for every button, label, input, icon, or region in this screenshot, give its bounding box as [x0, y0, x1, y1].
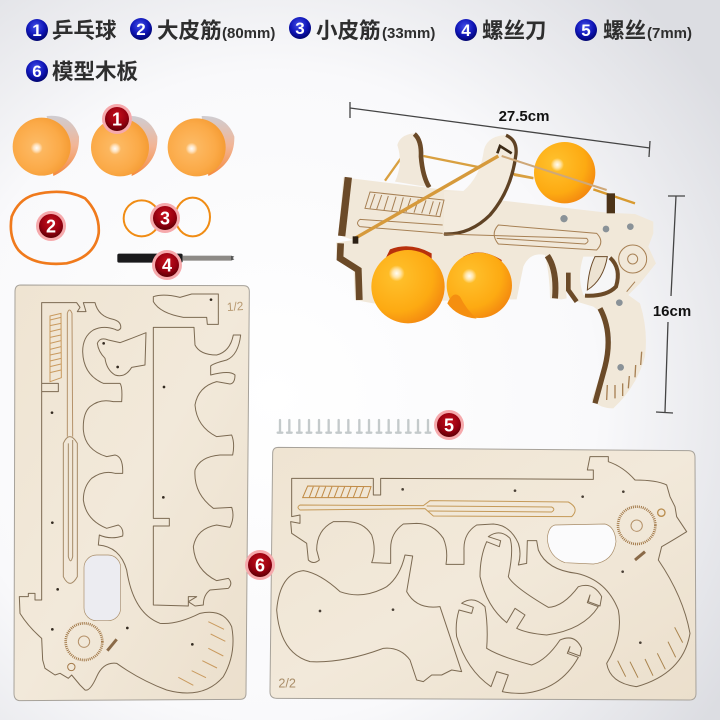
assembled gun: [336, 133, 656, 408]
ping pong ball right: [168, 116, 234, 176]
legend item 4: 螺丝刀: [482, 19, 547, 43]
window: [547, 524, 616, 564]
curved piece lower: [456, 600, 582, 693]
badge 2: 2: [46, 216, 56, 236]
curved piece upper: [480, 533, 602, 635]
legend item 6: 6: [32, 62, 42, 81]
legend item 5: 5: [581, 21, 591, 40]
small fin: [97, 333, 146, 376]
long gun outline: [291, 457, 690, 687]
gear: [66, 623, 117, 671]
legend item 4: 4: [461, 21, 471, 40]
dimension width: 27.5cm: [499, 108, 549, 125]
lower balls: [371, 246, 512, 323]
grip engraving: [178, 622, 225, 685]
grip piece: [277, 555, 462, 682]
gear: [618, 507, 665, 560]
small parts: [11, 116, 234, 264]
legend item 2: [130, 18, 275, 43]
screws: [560, 215, 634, 371]
legend item 3: (33mm): [382, 25, 435, 42]
ping pong ball middle: [91, 116, 157, 176]
badge 3: [150, 203, 180, 233]
legend item 5: 螺丝: [603, 19, 646, 43]
small rubber bands: [124, 198, 210, 236]
badge 5: 5: [444, 416, 454, 436]
board number: 2/2: [278, 676, 296, 690]
grip engraving: [618, 627, 683, 678]
board: [270, 447, 696, 700]
rubber band across: [353, 156, 635, 240]
rear fin: [395, 133, 429, 187]
legend item 5: [575, 19, 692, 43]
dimension width: [350, 102, 650, 157]
legend item 1: 1: [32, 21, 42, 40]
legend item 2: (80mm): [222, 25, 275, 42]
front fin: [444, 135, 517, 234]
legend item 3: 3: [295, 19, 305, 38]
long gun outline: [19, 303, 233, 693]
gun body: [336, 177, 656, 408]
large rubber band: [11, 192, 99, 264]
badge 1: 1: [112, 110, 122, 130]
screws row: [278, 420, 430, 433]
parts legend: [26, 17, 692, 84]
top fin: [153, 294, 218, 324]
wood board 2/2: [270, 447, 696, 700]
badge 5: [434, 410, 464, 440]
slots: [63, 310, 77, 583]
board number: 1/2: [226, 299, 244, 314]
badge 6: [245, 550, 275, 580]
screw holes: [51, 298, 212, 646]
wood board 1/2: [14, 285, 249, 701]
badge 1: [102, 104, 132, 134]
screw row glyphs: [278, 420, 430, 433]
trigger guard: [580, 257, 618, 296]
legend item 6: 模型木板: [52, 60, 139, 84]
engraving: [357, 192, 647, 400]
engraved rack: [50, 313, 61, 382]
window: [84, 555, 121, 621]
board: [14, 285, 249, 701]
rear rubber band: [385, 154, 533, 181]
dimension height: [653, 196, 691, 413]
plywood edges: [340, 177, 608, 403]
ball on top: [534, 142, 595, 203]
legend item 2: 2: [136, 20, 146, 39]
dimension height: 16cm: [653, 303, 691, 320]
long inner piece: [153, 327, 241, 606]
ping pong ball left: [13, 116, 79, 176]
legend item 2: 大皮筋: [157, 19, 222, 43]
slots: [298, 501, 575, 517]
legend item 5: (7mm): [647, 25, 692, 42]
badge 2: [36, 211, 66, 241]
legend item 1: 乒乓球: [52, 19, 117, 43]
legend item 3: [289, 17, 435, 43]
badge 6: 6: [255, 556, 265, 576]
badge 4: [152, 250, 182, 280]
legend item 3: 小皮筋: [316, 19, 381, 43]
screw holes: [319, 488, 642, 644]
badge 4: 4: [162, 256, 172, 276]
marker badges: [36, 104, 464, 580]
screwdriver: [117, 254, 234, 263]
badge 3: 3: [160, 208, 170, 228]
engraved rack: [303, 486, 371, 498]
